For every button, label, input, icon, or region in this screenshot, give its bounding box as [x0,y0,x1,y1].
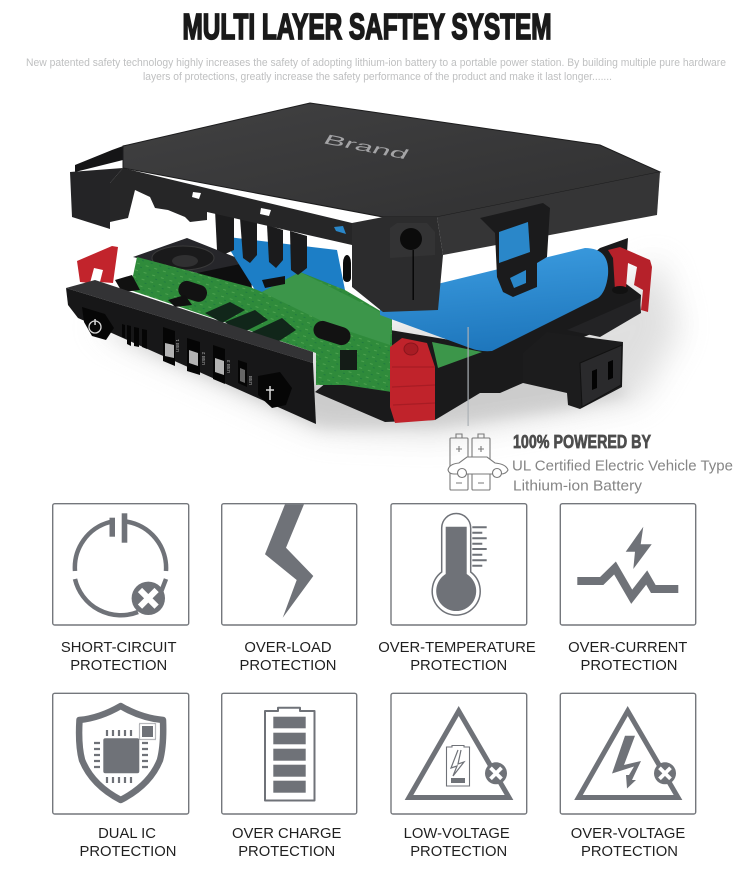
icon: lightning bolt [265,504,313,618]
label: PROTECTION [580,658,678,674]
label: OVER CHARGE [232,826,342,842]
label: PROTECTION [410,658,507,674]
speaker box [133,238,252,290]
main battery [380,248,608,351]
callout line [468,327,469,426]
label: PROTECTION [239,658,337,674]
left corner block [70,168,123,229]
panel: over-load protection [222,504,357,674]
label: DUAL IC [98,826,156,842]
callout heading: 100% POWERED BY [513,432,651,452]
panel: low-voltage protection [391,693,527,860]
panel: short-circuit protection [53,504,189,674]
label: PROTECTION [79,844,177,860]
USB ports: USB 3 [226,359,231,373]
capacitors [176,279,353,347]
DC button [258,372,292,408]
icon: full battery [265,708,314,800]
USB ports [163,327,253,387]
latch [480,203,550,297]
left red clip [77,246,118,283]
right side face [437,172,660,255]
label: OVER-CURRENT [568,640,687,656]
panel: over-current protection [560,504,696,674]
panel: over charge protection [222,693,357,860]
panel: dual IC protection [53,693,189,860]
keyhole [343,255,351,282]
panel: over-voltage protection [560,693,696,860]
battery callout [448,432,733,494]
label: SHORT-CIRCUIT [61,640,177,656]
lid rear bump [75,146,123,172]
right corner block [352,217,443,312]
USB ports: USB [248,376,253,385]
lid front lip [110,168,352,245]
label: PROTECTION [70,658,167,674]
product exploded view [66,103,680,435]
label: PROTECTION [238,844,335,860]
label: LOW-VOLTAGE [404,826,510,842]
label: OVER-LOAD [244,640,332,656]
label: PROTECTION [581,844,678,860]
lip windows [192,192,271,216]
center red clip [390,338,435,423]
right red clip [608,247,652,312]
label: PROTECTION [410,844,507,860]
top surface [123,103,660,217]
intro text: layers of protections, greatly increase the safety performance of the product and make it last longer....... [143,71,612,83]
rear battery [228,237,347,330]
lower tray [315,238,641,422]
callout body: UL Certified Electric Vehicle Type [512,458,733,474]
intro text [26,57,726,83]
circuit board [130,257,482,392]
icon: batteries with car [448,434,508,490]
icon: warning triangle with battery [409,711,509,798]
icon: circuit [75,513,166,615]
front panel [66,280,316,424]
lid posts [215,210,307,275]
power switch [82,307,114,340]
label: OVER-TEMPERATURE [378,640,536,656]
title: MULTI LAYER SAFTEY SYSTEM [182,6,552,47]
brand mark: Brand [320,132,412,163]
lid [70,103,660,312]
icon: shield with chips [79,706,163,800]
ground shadow [90,260,680,435]
intro text: New patented safety technology highly increases the safety of adopting lithium-ion battery to a portable power station. By building multiple pure hardware [26,57,726,69]
USB ports: USB 2 [201,351,206,365]
USB ports: USB 1 [175,338,180,352]
callout body: Lithium-ion Battery [513,478,643,494]
plug [523,298,641,409]
callout body [512,458,733,494]
icon: warning triangle with bolt [578,711,678,798]
black bracket under panel [115,275,140,292]
panel: over-temperature protection [378,504,536,674]
dark chips [168,276,357,370]
icon: current spike [577,527,678,597]
vents [122,324,147,349]
icon: thermometer [432,514,487,615]
label: OVER-VOLTAGE [571,826,685,842]
